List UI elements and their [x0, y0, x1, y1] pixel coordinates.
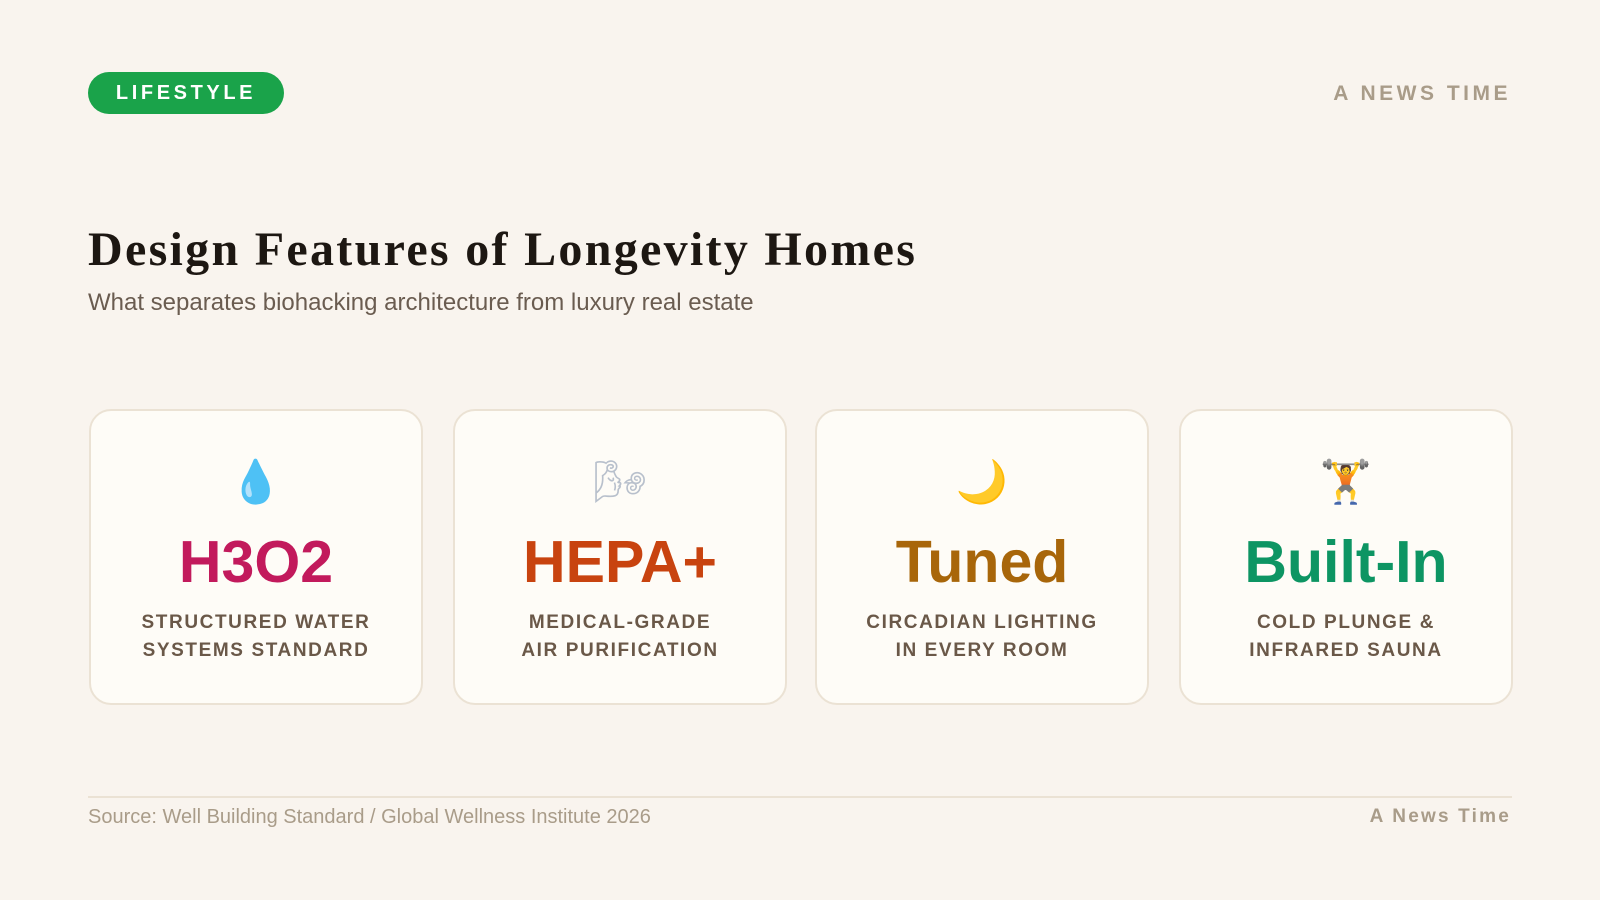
label: AIR PURIFICATION [521, 640, 719, 661]
label: SYSTEMS STANDARD [143, 640, 369, 661]
subtitle: What separates biohacking architecture from luxury real estate [88, 289, 754, 316]
icon: wind face: 🌬 [593, 457, 647, 506]
label: CIRCADIAN LIGHTING [866, 612, 1098, 633]
label: STRUCTURED WATER [142, 612, 370, 633]
footer brand: A News Time [1370, 806, 1511, 827]
title: Design Features of Longevity Homes [88, 223, 917, 276]
source note: Source: Well Building Standard / Global Wellness Institute 2026 [88, 806, 651, 828]
card: fitness [1179, 409, 1513, 705]
label: MEDICAL-GRADE [529, 612, 711, 633]
card: water [89, 409, 423, 705]
label [521, 612, 719, 661]
stat: HEPA+: HEPA+ [523, 529, 717, 595]
label [866, 612, 1098, 661]
icon: moon: 🌙 [956, 457, 1008, 506]
stat: Built-In: Built-In [1244, 529, 1448, 595]
category pill [88, 72, 284, 114]
stat: Tuned: Tuned [896, 529, 1068, 595]
brand top right: A NEWS TIME [1333, 82, 1511, 105]
label [1249, 612, 1443, 661]
label: IN EVERY ROOM [896, 640, 1068, 661]
icon: water drop: 💧 [230, 457, 282, 506]
label [142, 612, 370, 661]
stat: H3O2: H3O2 [179, 529, 333, 595]
category pill: LIFESTYLE [116, 82, 256, 104]
icon: weightlifter: 🏋 [1320, 457, 1372, 506]
label: COLD PLUNGE & [1257, 612, 1435, 633]
card: air [453, 409, 787, 705]
card: lighting [815, 409, 1149, 705]
label: INFRARED SAUNA [1249, 640, 1443, 661]
